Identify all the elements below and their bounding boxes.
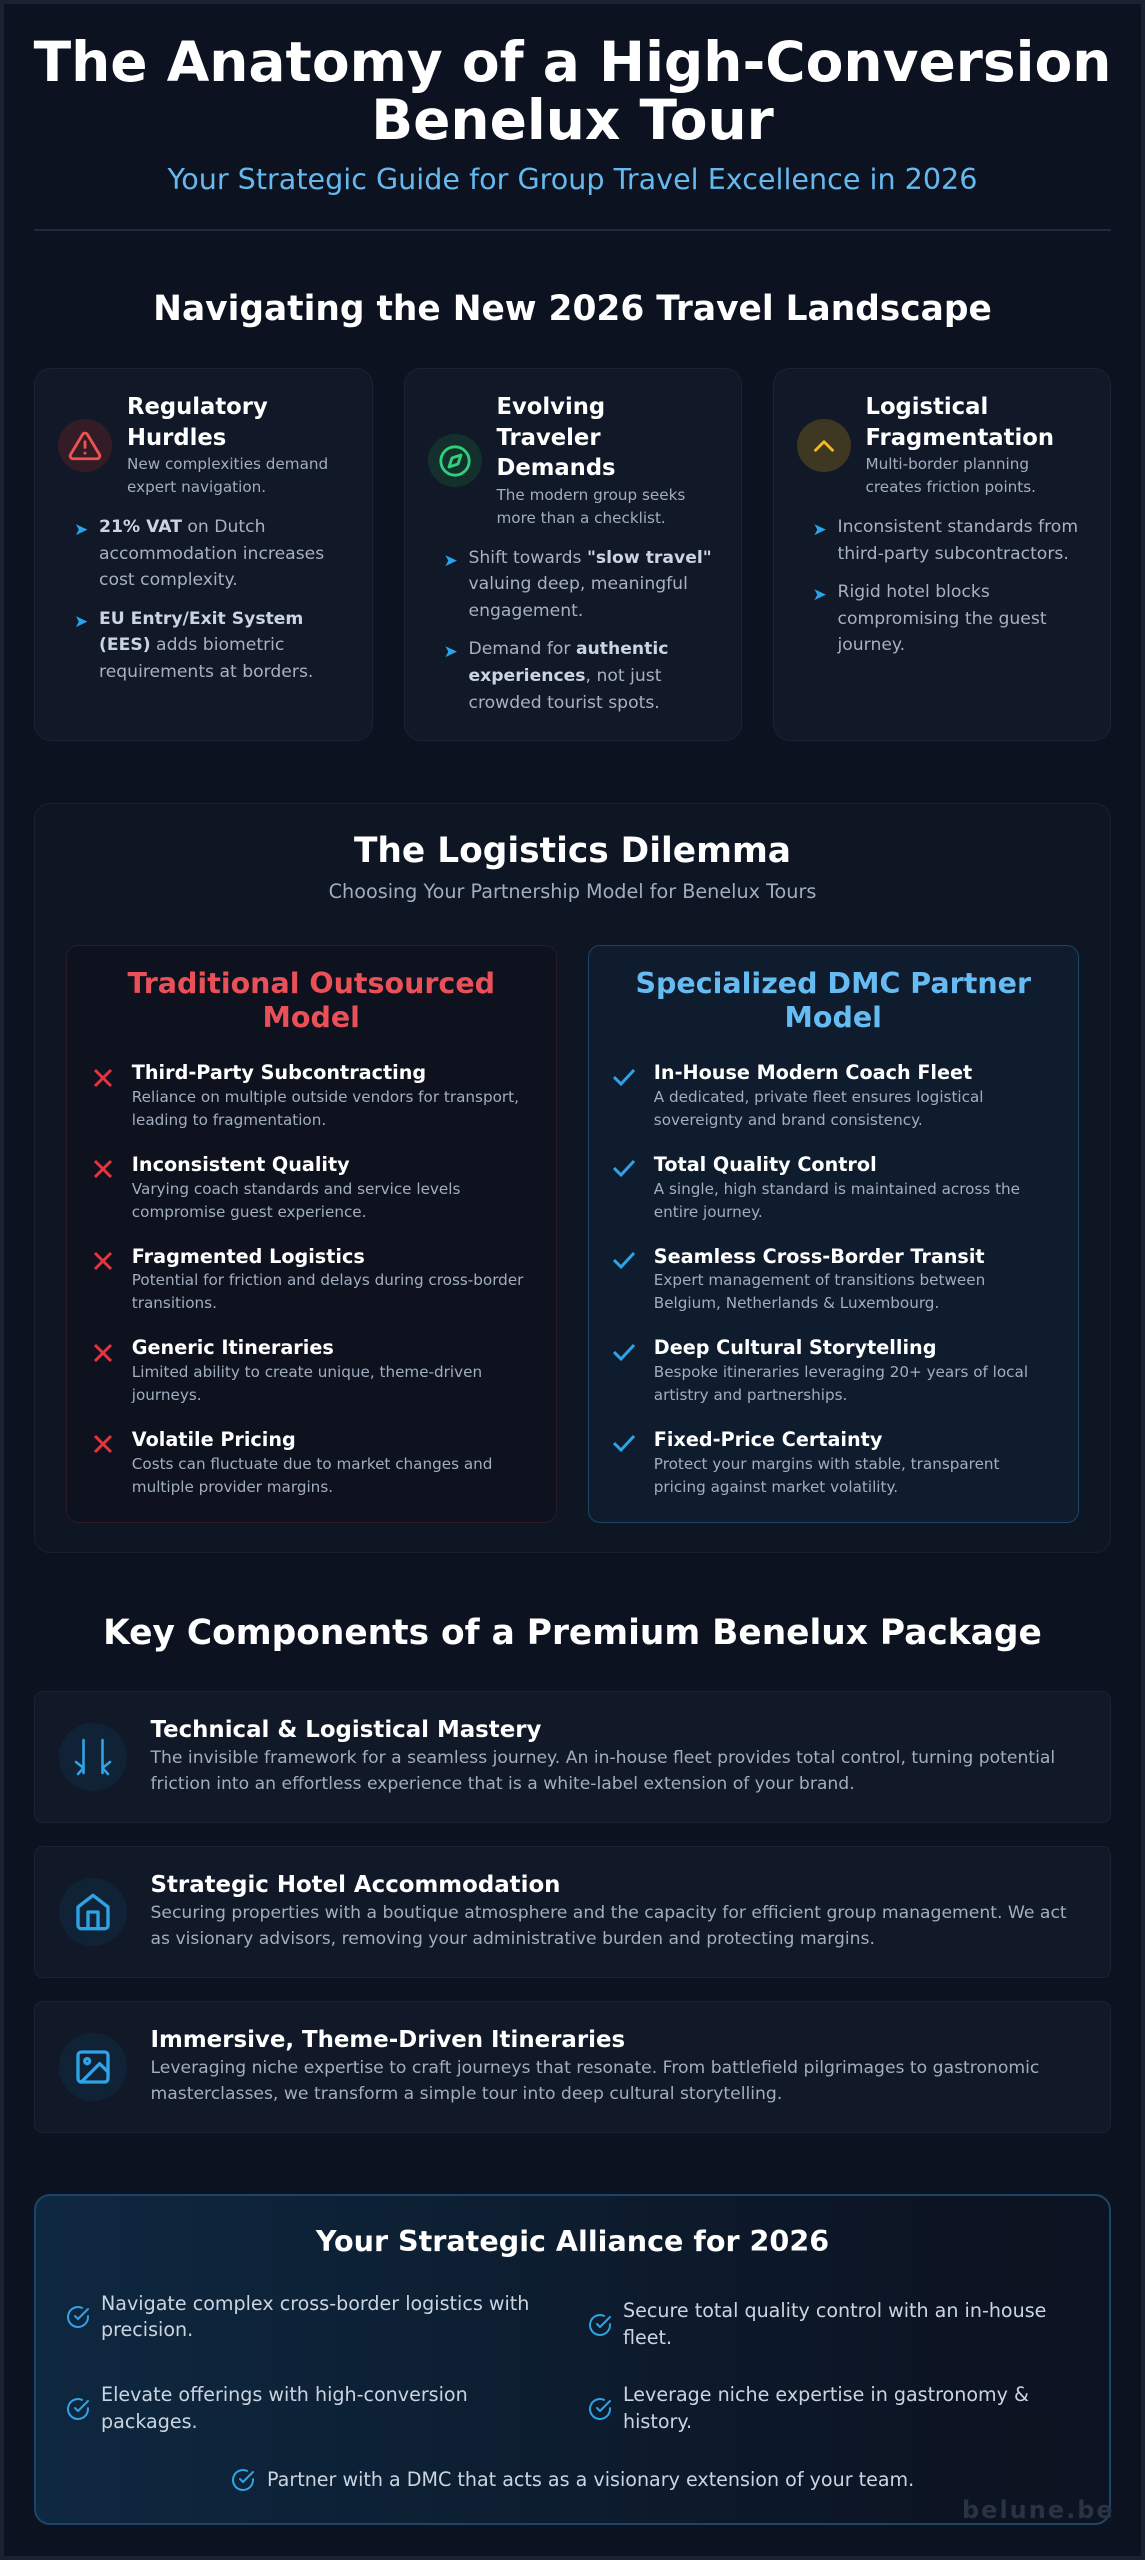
icon: chevron up — [796, 419, 850, 472]
bullet: standards — [838, 517, 1078, 564]
panel: strategic hotel accommodation — [34, 1846, 1111, 1978]
bullet: slow travel: Shift towards "slow travel" — [468, 548, 712, 568]
card heading: Regulatory — [127, 394, 268, 420]
item text — [132, 1455, 492, 1496]
bullet: EES: EU Entry/Exit System — [99, 608, 303, 628]
icon: picture — [58, 2033, 126, 2101]
card heading — [127, 394, 268, 451]
item text: Expert management of transitions between — [654, 1271, 985, 1289]
icon: cross — [94, 1069, 112, 1087]
icon: check circle — [66, 2305, 90, 2329]
item: inconsistent quality — [94, 1153, 460, 1221]
column heading — [127, 966, 495, 1034]
panel: specialized DMC partner model — [588, 945, 1078, 1523]
card heading: Fragmentation — [866, 425, 1054, 451]
item: quality control — [588, 2296, 1058, 2356]
bullet: EES: (EES) adds biometric — [99, 635, 284, 655]
item title: Inconsistent Quality — [132, 1153, 350, 1176]
icon: check circle — [588, 2313, 612, 2337]
column heading: Traditional Outsourced — [127, 966, 495, 1000]
icon: cross — [94, 1435, 112, 1453]
item text: leading to fragmentation. — [132, 1111, 326, 1129]
component title: Strategic Hotel Accommodation — [150, 1872, 560, 1898]
item: generic itineraries — [94, 1336, 482, 1404]
bullet: hotel blocks: Rigid hotel blocks — [838, 582, 990, 602]
heading: key components: Key Components of a Premium Benelux Package — [103, 1613, 1042, 1653]
title — [34, 30, 1111, 152]
heading: The Logistics Dilemma — [354, 831, 791, 871]
column heading: Model — [263, 1001, 360, 1034]
item text: entire journey. — [654, 1203, 763, 1221]
panel: immersive itineraries — [34, 2001, 1111, 2133]
bullet: slow travel — [468, 548, 712, 621]
item text — [654, 1271, 985, 1312]
item text: Costs can fluctuate due to market changes and — [132, 1455, 492, 1473]
card intro: more than a checklist. — [496, 509, 666, 527]
header — [34, 30, 1111, 196]
icon: check — [613, 1341, 635, 1363]
bullet: standards: Inconsistent standards from — [838, 517, 1078, 537]
item text: multiple provider margins. — [132, 1478, 333, 1496]
item text: Secure total quality control with an in-house — [623, 2299, 1046, 2322]
item title: Third-Party Subcontracting — [132, 1061, 426, 1084]
bullet: authentic experiences — [468, 639, 668, 713]
item: volatile pricing — [94, 1428, 492, 1496]
item text: Protect your margins with stable, transparent — [654, 1455, 1000, 1473]
card heading: Demands — [496, 455, 616, 481]
item text: precision. — [101, 2318, 193, 2341]
bullet: VAT: accommodation increases — [99, 544, 324, 564]
card intro — [866, 455, 1036, 496]
card intro: expert navigation. — [127, 478, 266, 496]
card intro — [127, 455, 328, 496]
arrow marker: ➤ — [812, 520, 827, 540]
bullet: hotel blocks: journey. — [838, 635, 905, 655]
item text: Elevate offerings with high-conversion — [101, 2383, 468, 2406]
icon: check circle — [231, 2468, 255, 2492]
subtitle: Your Strategic Guide for Group Travel Excellence in 2026 — [168, 162, 977, 196]
column heading: Specialized DMC Partner — [636, 966, 1031, 1000]
item text: packages. — [101, 2410, 198, 2433]
item: fragmented logistics — [94, 1245, 524, 1312]
item text — [654, 1361, 1028, 1407]
bullet: standards: third-party subcontractors. — [838, 544, 1069, 564]
card intro: Multi-border planning — [866, 455, 1029, 473]
item text: transitions. — [132, 1294, 217, 1312]
bullet: authentic experiences: experiences, not just — [468, 666, 661, 686]
component text: Leveraging niche expertise to craft journeys that resonate. From battlefield pilgrimages to gastronomic — [150, 2058, 1039, 2078]
icon: house — [58, 1878, 126, 1946]
watermark: belune.be — [962, 2496, 1115, 2524]
icon: cross — [94, 1252, 112, 1270]
bullet: slow travel: engagement. — [468, 601, 583, 621]
item text — [623, 2298, 1046, 2351]
item title: Volatile Pricing — [132, 1428, 296, 1451]
item title: Seamless Cross-Border Transit — [654, 1245, 985, 1268]
item text: compromise guest experience. — [132, 1203, 366, 1221]
item text: history. — [623, 2410, 692, 2433]
bullet: VAT — [99, 517, 324, 590]
column heading: Model — [785, 1001, 882, 1034]
arrow marker: ➤ — [812, 585, 827, 605]
item: fixed-price certainty — [589, 1428, 1077, 1498]
component text: masterclasses, we transform a simple tour into deep cultural storytelling. — [150, 2084, 782, 2104]
bullet: VAT: 21% VAT on Dutch — [99, 517, 266, 537]
arrow marker: ➤ — [444, 550, 458, 570]
item title: Fixed-Price Certainty — [654, 1428, 882, 1451]
panel: evolving traveler demands — [404, 368, 742, 741]
panel: the logistics dilemma — [34, 803, 1111, 1553]
bullet: hotel blocks: compromising the guest — [838, 609, 1047, 629]
bullet: slow travel: valuing deep, meaningful — [468, 574, 688, 594]
item: total quality control — [613, 1153, 1020, 1221]
item text: Reliance on multiple outside vendors for transport, — [132, 1088, 519, 1106]
item text: Belgium, Netherlands & Luxembourg. — [654, 1294, 939, 1312]
item: high-conversion packages — [66, 2386, 536, 2446]
item text — [654, 1180, 1020, 1221]
item text: Leverage niche expertise in gastronomy & — [623, 2383, 1029, 2406]
panel: regulatory hurdles — [34, 368, 372, 741]
title: Benelux Tour — [371, 88, 774, 152]
icon: warning triangle — [58, 419, 112, 472]
icon: double harpoon arrows — [58, 1723, 126, 1791]
item text: pricing against market volatility. — [654, 1478, 898, 1496]
icon: check circle — [588, 2397, 612, 2421]
card heading: Traveler — [496, 425, 601, 451]
item text — [101, 2291, 529, 2344]
card heading: Hurdles — [127, 425, 226, 451]
column heading — [636, 966, 1031, 1034]
card heading — [866, 394, 1054, 451]
item text: fleet. — [623, 2326, 672, 2349]
item title: Total Quality Control — [654, 1153, 877, 1176]
title: The Anatomy of a High-Conversion — [34, 30, 1111, 94]
icon: check — [613, 1432, 635, 1454]
item text: A dedicated, private fleet ensures logistical — [654, 1088, 984, 1106]
subheading: Choosing Your Partnership Model for Benelux Tours — [329, 880, 816, 903]
item title: Deep Cultural Storytelling — [654, 1336, 936, 1359]
item: in-house fleet — [613, 1061, 984, 1129]
item text — [132, 1271, 524, 1312]
item text — [654, 1088, 984, 1129]
item text: Partner with a DMC that acts as a visionary extension of your team. — [267, 2468, 914, 2491]
panel: strategic alliance — [34, 2194, 1111, 2525]
panel: logistical fragmentation — [772, 368, 1111, 741]
icon: check — [613, 1069, 635, 1086]
item title: Fragmented Logistics — [132, 1245, 365, 1268]
bullet: VAT: cost complexity. — [99, 570, 238, 590]
item text: artistry and partnerships. — [654, 1386, 847, 1404]
heading: Your Strategic Alliance for 2026 — [316, 2224, 829, 2258]
icon: check circle — [66, 2397, 90, 2421]
heading: navigating the landscape: Navigating the New 2026 Travel Landscape — [153, 289, 992, 329]
icon: cross — [94, 1344, 112, 1362]
card heading: Evolving — [496, 394, 605, 420]
component text — [150, 1900, 1067, 1953]
item text: Potential for friction and delays during cross-border — [132, 1271, 523, 1289]
card intro: creates friction points. — [866, 478, 1036, 496]
item: cross-border logistics — [66, 2296, 536, 2356]
arrow marker: ➤ — [444, 642, 458, 662]
component text — [150, 2055, 1039, 2108]
bullet: EES: requirements at borders. — [99, 662, 313, 682]
panel: technical and logistical mastery — [34, 1691, 1111, 1823]
card intro: New complexities demand — [127, 455, 328, 473]
item text — [101, 2382, 468, 2435]
icon: check — [613, 1160, 635, 1178]
component text: as visionary advisors, removing your administrative burden and protecting margins. — [150, 1929, 875, 1949]
item: third-party subcontracting — [94, 1061, 519, 1129]
component text: friction into an effortless experience that is a white-label extension of your brand. — [150, 1774, 855, 1794]
component text: Securing properties with a boutique atmosphere and the capacity for efficient group management. We act — [150, 1903, 1067, 1923]
item text: sovereignty and brand consistency. — [654, 1111, 923, 1129]
bullet: hotel blocks — [837, 582, 1047, 655]
component title: Technical & Logistical Mastery — [150, 1717, 541, 1743]
item text: journeys. — [132, 1386, 202, 1404]
item text: Limited ability to create unique, theme-driven — [132, 1363, 482, 1381]
icon: cross — [94, 1160, 112, 1178]
item text — [623, 2382, 1029, 2435]
item text: Varying coach standards and service levels — [132, 1180, 460, 1198]
card intro — [496, 486, 685, 527]
component text — [150, 1745, 1055, 1798]
panel: traditional outsourced model — [66, 945, 556, 1523]
item text — [132, 1180, 460, 1221]
item text: Bespoke itineraries leveraging 20+ years of local — [654, 1363, 1028, 1381]
item title: In-House Modern Coach Fleet — [654, 1061, 972, 1084]
card intro: The modern group seeks — [496, 486, 685, 504]
item text: A single, high standard is maintained across the — [654, 1180, 1020, 1198]
component title: Immersive, Theme-Driven Itineraries — [150, 2027, 625, 2053]
arrow marker: ➤ — [74, 520, 88, 540]
item title: Generic Itineraries — [132, 1336, 334, 1359]
item: cross-border transit — [613, 1245, 985, 1312]
item text — [132, 1088, 519, 1129]
bullet: authentic experiences: crowded tourist spots. — [468, 693, 660, 713]
arrow marker: ➤ — [74, 612, 88, 632]
item: niche expertise — [588, 2386, 1058, 2446]
card heading — [496, 394, 616, 481]
item: cultural storytelling — [589, 1336, 1077, 1406]
bullet: EES — [99, 608, 313, 682]
icon: check — [613, 1252, 635, 1270]
item text: Navigate complex cross-border logistics with — [101, 2292, 529, 2315]
icon: compass — [428, 434, 482, 487]
bullet: authentic experiences: Demand for authentic — [468, 639, 668, 659]
item text — [654, 1453, 1000, 1499]
component text: The invisible framework for a seamless journey. An in-house fleet provides total control, turning potential — [150, 1748, 1055, 1768]
item: visionary extension — [231, 2466, 951, 2496]
item text — [131, 1363, 482, 1404]
card heading: Logistical — [866, 394, 988, 420]
